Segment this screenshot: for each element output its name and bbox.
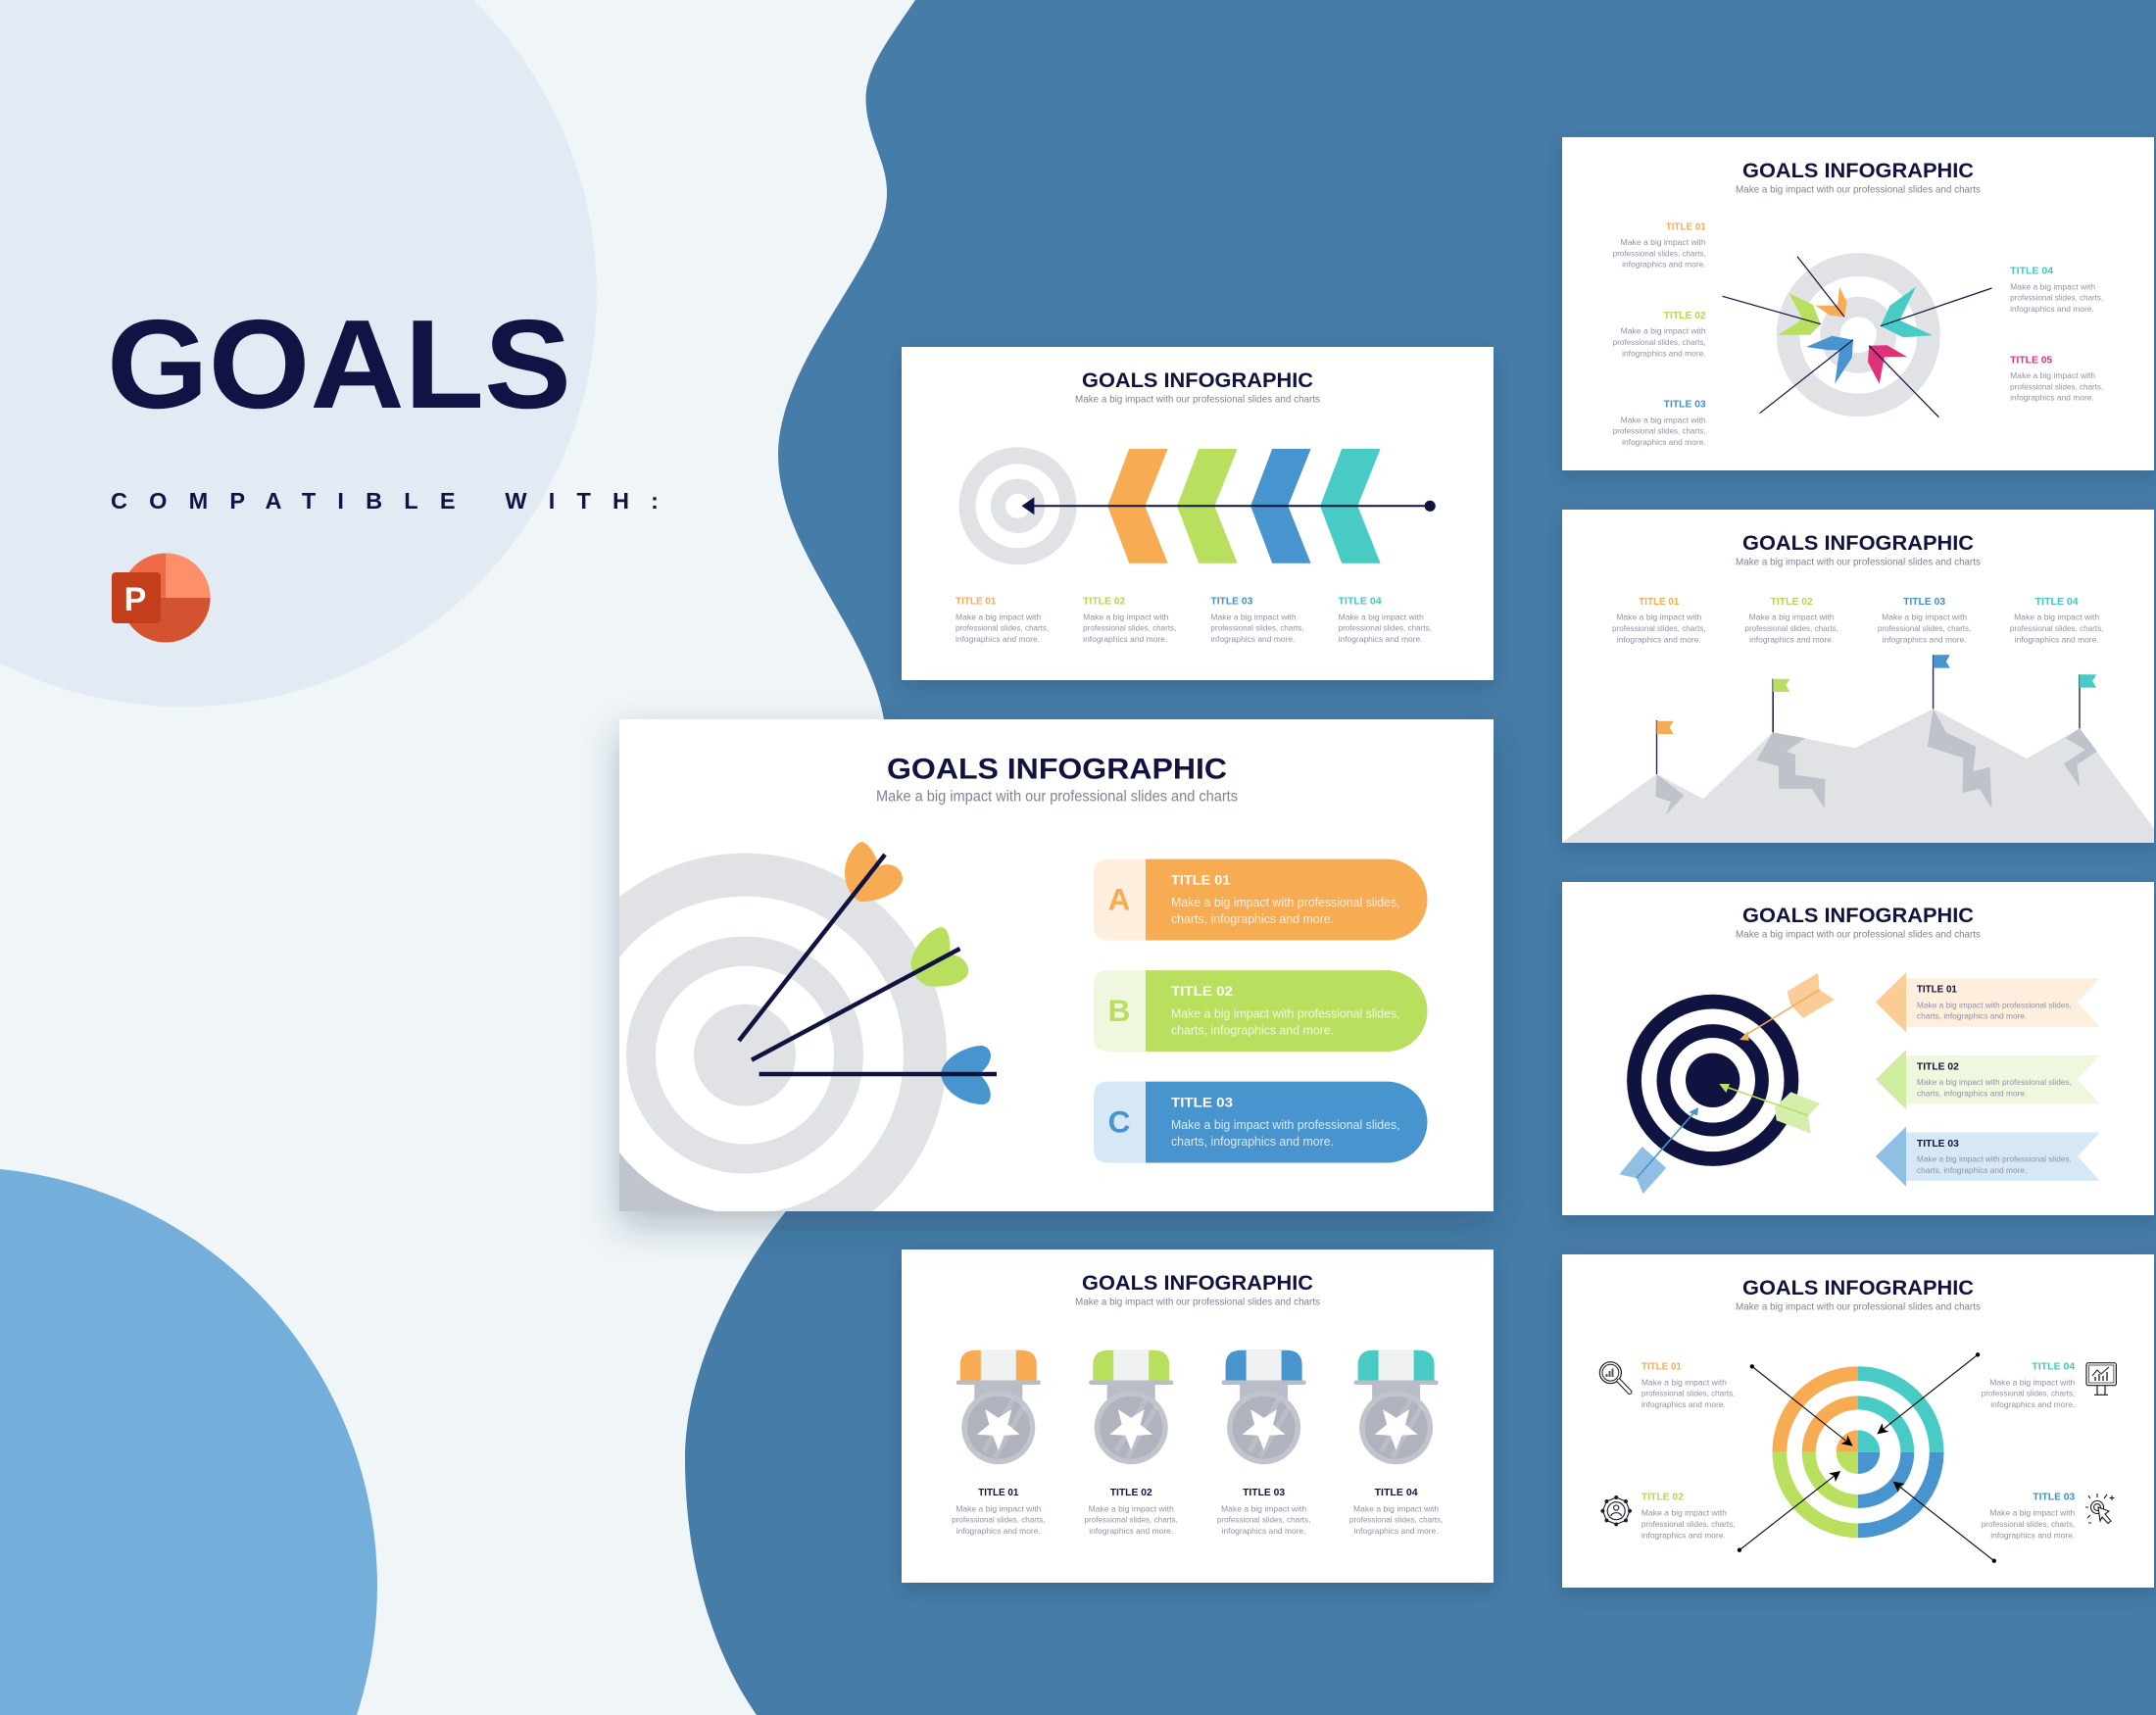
medal 01 with text: TITLE 01 (978, 1488, 1019, 1498)
slide subtitle: Make a big impact with our professional slides and charts (1075, 394, 1320, 406)
text block 02: professional slides, charts, (1642, 1520, 1735, 1529)
flag: green (1773, 679, 1789, 732)
pill A (1094, 859, 1427, 941)
medal 04 with text: professional slides, charts, (1349, 1516, 1443, 1525)
text column 01 (1612, 597, 1706, 644)
panel: five arrows target slide (1562, 137, 2154, 470)
pill C (1094, 1082, 1427, 1162)
navy target (1627, 995, 1798, 1166)
medal 02 with text (1084, 1350, 1178, 1536)
text block 01 (1613, 221, 1706, 270)
mountains (1562, 709, 2156, 843)
chevrons (1107, 449, 1381, 564)
ribbon 02: TITLE 02 (1917, 1061, 1959, 1072)
column text 04: professional slides, charts, (1339, 624, 1432, 633)
text column 02: Make a big impact with (1749, 613, 1835, 622)
text block 04: professional slides, charts, (2010, 294, 2103, 303)
column text 02: infographics and more. (1083, 635, 1167, 644)
background blue wave (685, 0, 2156, 1715)
medal 03 with text: TITLE 03 (1243, 1488, 1286, 1498)
pill C: charts, infographics and more. (1171, 1135, 1334, 1149)
ribbon 03 (1876, 1127, 2100, 1187)
panel: medals slide (902, 1250, 1494, 1583)
pill C: TITLE 03 (1171, 1095, 1233, 1110)
pill B: charts, infographics and more. (1171, 1023, 1334, 1037)
hero heading: GOALS INFOGRAPHIC (887, 753, 1227, 786)
text block 02: professional slides, charts, (1613, 338, 1706, 347)
text block 02 (1642, 1493, 1735, 1540)
column text 02: TITLE 02 (1083, 597, 1126, 608)
text column 03 (1878, 597, 1971, 644)
ribbon 03: TITLE 03 (1917, 1139, 1959, 1150)
text column 01: professional slides, charts, (1612, 624, 1706, 633)
slide heading: GOALS INFOGRAPHIC (1742, 1276, 1974, 1299)
slide heading: GOALS INFOGRAPHIC (1742, 904, 1974, 927)
arrow: orange (1797, 257, 1847, 317)
text block 05: infographics and more. (2010, 394, 2094, 403)
pill B: TITLE 02 (1171, 983, 1233, 999)
text column 03: TITLE 03 (1903, 597, 1946, 608)
medal 02 with text: professional slides, charts, (1084, 1516, 1178, 1525)
text block 02: Make a big impact with (1621, 327, 1706, 336)
column text 01: professional slides, charts, (956, 624, 1049, 633)
icon: magnifier (1599, 1362, 1630, 1392)
text block 03: TITLE 03 (2033, 1493, 2076, 1503)
background circle: top left (0, 0, 597, 707)
pill A: Make a big impact with professional slides, (1171, 896, 1400, 909)
arrow: green (752, 927, 968, 1060)
slide subtitle: Make a big impact with our professional slides and charts (1736, 557, 1981, 568)
slide subtitle: Make a big impact with our professional slides and charts (1075, 1297, 1320, 1308)
text block 03: Make a big impact with (1989, 1509, 2075, 1518)
panel: navy target with ribbons slide (1562, 882, 2154, 1215)
text block 04: infographics and more. (2010, 305, 2094, 314)
text block 02: Make a big impact with (1642, 1509, 1727, 1518)
icon: click cursor (2085, 1494, 2115, 1523)
text block 03: infographics and more. (1990, 1531, 2075, 1540)
column text 03: TITLE 03 (1210, 597, 1253, 608)
medal 02 with text: infographics and more. (1089, 1527, 1173, 1536)
text block 03: infographics and more. (1622, 438, 1706, 447)
column text 02: professional slides, charts, (1083, 624, 1176, 633)
medal 04 with text (1349, 1350, 1443, 1536)
flag: blue (1934, 655, 1950, 709)
text column 01: Make a big impact with (1616, 613, 1701, 622)
column text 04: infographics and more. (1339, 635, 1423, 644)
text block 04: Make a big impact with (2010, 282, 2095, 291)
text block 05: TITLE 05 (2010, 355, 2053, 366)
text block 04: TITLE 04 (2010, 267, 2054, 277)
medal 04 with text: infographics and more. (1354, 1527, 1439, 1536)
slide heading: GOALS INFOGRAPHIC (1742, 159, 1974, 182)
arrow: blue (760, 1046, 997, 1104)
slide heading: GOALS INFOGRAPHIC (1082, 368, 1313, 392)
hero subtitle: Make a big impact with our professional slides and charts (876, 788, 1238, 806)
text block 03: professional slides, charts, (1982, 1520, 2075, 1529)
flag: teal (2080, 674, 2096, 728)
text block 01: Make a big impact with (1621, 238, 1706, 247)
arrows to centre (1738, 1353, 1995, 1562)
text block 04: TITLE 04 (2032, 1361, 2076, 1372)
ribbon 02 (1876, 1050, 2100, 1109)
text block 02 (1613, 311, 1706, 358)
arrow: teal (1881, 287, 1991, 337)
text block 04: Make a big impact with (1989, 1378, 2075, 1387)
text block 02: TITLE 02 (1664, 311, 1706, 321)
column text 01: TITLE 01 (956, 597, 997, 608)
text column 01: TITLE 01 (1639, 597, 1680, 608)
arrow: blue (1760, 336, 1853, 414)
medal 02 with text: Make a big impact with (1089, 1504, 1174, 1513)
column text 01 (956, 597, 1049, 644)
text block 03: TITLE 03 (1664, 400, 1706, 411)
medal 01 with text: infographics and more. (956, 1527, 1041, 1536)
icon: presentation monitor (2086, 1363, 2116, 1395)
text column 01: infographics and more. (1617, 635, 1701, 644)
panel: mountains slide (1562, 510, 2156, 843)
text block 04 (2010, 267, 2103, 314)
text column 04: professional slides, charts, (2010, 624, 2103, 633)
arrow line (1021, 497, 1436, 514)
text column 02: TITLE 02 (1771, 597, 1813, 608)
column text 03: professional slides, charts, (1210, 624, 1304, 633)
column text 03 (1210, 597, 1304, 644)
segmented target (1772, 1366, 1944, 1538)
text block 03: Make a big impact with (1621, 416, 1706, 424)
slide subtitle: Make a big impact with our professional slides and charts (1736, 1301, 1981, 1313)
pill B (1094, 970, 1427, 1052)
medal 02 with text: TITLE 02 (1110, 1488, 1152, 1498)
text block 01: Make a big impact with (1642, 1378, 1727, 1387)
text block 01: TITLE 01 (1642, 1361, 1682, 1372)
text block 04: professional slides, charts, (1982, 1390, 2075, 1398)
text column 04 (2010, 597, 2103, 644)
ribbon 01: charts, infographics and more. (1917, 1012, 2027, 1021)
main title: GOALS (107, 294, 571, 435)
text column 03: infographics and more. (1883, 635, 1967, 644)
column text 01: infographics and more. (956, 635, 1040, 644)
medal 03 with text: infographics and more. (1222, 1527, 1306, 1536)
text block 05 (2010, 355, 2103, 403)
text block 01: TITLE 01 (1666, 221, 1706, 232)
target rings (1777, 253, 1940, 416)
arrow: blue (1619, 1107, 1698, 1194)
column text 02: Make a big impact with (1083, 612, 1168, 621)
text block 01: professional slides, charts, (1613, 249, 1706, 258)
slide subtitle: Make a big impact with our professional slides and charts (1736, 929, 1981, 941)
text column 03: Make a big impact with (1882, 613, 1967, 622)
column text 04 (1339, 597, 1432, 644)
text block 03: professional slides, charts, (1613, 427, 1706, 436)
column text 04: TITLE 04 (1339, 597, 1382, 608)
text column 04: Make a big impact with (2014, 613, 2099, 622)
text block 01: infographics and more. (1642, 1400, 1726, 1409)
panel: segmented target slide (1562, 1254, 2154, 1588)
pill C: Make a big impact with professional slides, (1171, 1118, 1400, 1132)
text column 02: professional slides, charts, (1744, 624, 1838, 633)
text column 04: TITLE 04 (2035, 597, 2079, 608)
text column 02 (1744, 597, 1838, 644)
slide subtitle: Make a big impact with our professional slides and charts (1736, 184, 1981, 196)
text block 01: infographics and more. (1622, 261, 1706, 270)
medal 01 with text (952, 1350, 1045, 1536)
text column 04: infographics and more. (2015, 635, 2099, 644)
arrow: orange (739, 842, 903, 1041)
medal 01 with text: professional slides, charts, (952, 1516, 1046, 1525)
flag: orange (1656, 720, 1674, 774)
icon: PowerPoint logo: P (124, 581, 146, 618)
text block 01 (1642, 1361, 1735, 1409)
text block 02: infographics and more. (1622, 349, 1706, 358)
text block 04: infographics and more. (1990, 1400, 2075, 1409)
medal 04 with text: TITLE 04 (1375, 1488, 1418, 1498)
icon: PowerPoint logo (112, 553, 210, 643)
ribbon 01 (1876, 972, 2100, 1032)
slide heading: GOALS INFOGRAPHIC (1742, 531, 1974, 555)
background circle: bottom left (0, 1169, 377, 1715)
ribbon 01: TITLE 01 (1917, 985, 1957, 996)
column text 04: Make a big impact with (1339, 612, 1424, 621)
medal 01 with text: Make a big impact with (956, 1504, 1041, 1513)
pill A: TITLE 01 (1171, 872, 1231, 888)
text block 03 (1982, 1493, 2076, 1540)
compatible with label: COMPATIBLE WITH: (111, 488, 659, 514)
icon: network (1601, 1496, 1631, 1526)
pill C: C (1108, 1104, 1130, 1140)
arrow: green (1719, 1084, 1820, 1134)
column text 03: Make a big impact with (1210, 612, 1297, 621)
ribbon 03: charts, infographics and more. (1917, 1166, 2027, 1175)
text block 04 (1982, 1361, 2076, 1409)
text column 03: professional slides, charts, (1878, 624, 1971, 633)
text block 02: infographics and more. (1642, 1531, 1726, 1540)
column text 01: Make a big impact with (956, 612, 1041, 621)
pill A: A (1108, 882, 1130, 917)
medal 04 with text: Make a big impact with (1353, 1504, 1439, 1513)
text block 02: TITLE 02 (1642, 1493, 1684, 1503)
medal 03 with text (1217, 1350, 1310, 1536)
panel: fletched arrows chevron slide (902, 347, 1494, 680)
panel: hero slide with target and pills (543, 719, 1494, 1257)
pill B: B (1108, 993, 1130, 1028)
ribbon 01: Make a big impact with professional slides, (1917, 1001, 2072, 1009)
ribbon 02: charts, infographics and more. (1917, 1089, 2027, 1098)
medal 03 with text: professional slides, charts, (1217, 1516, 1310, 1525)
text block 05: Make a big impact with (2010, 371, 2095, 380)
target icon (958, 447, 1076, 564)
pill A: charts, infographics and more. (1171, 912, 1334, 926)
text column 02: infographics and more. (1749, 635, 1834, 644)
column text 03: infographics and more. (1210, 635, 1295, 644)
text block 01: professional slides, charts, (1642, 1390, 1735, 1398)
column text 02 (1083, 597, 1176, 644)
arrow: orange (1740, 973, 1835, 1041)
arrow: pink (1868, 345, 1938, 417)
ribbon 03: Make a big impact with professional slides, (1917, 1155, 2072, 1164)
text block 03 (1613, 400, 1706, 447)
pill B: Make a big impact with professional slides, (1171, 1007, 1400, 1021)
text block 05: professional slides, charts, (2010, 382, 2103, 391)
large target (619, 853, 947, 1211)
arrow: green (1723, 293, 1821, 335)
slide heading: GOALS INFOGRAPHIC (1082, 1271, 1313, 1295)
medal 03 with text: Make a big impact with (1221, 1504, 1306, 1513)
ribbon 02: Make a big impact with professional slides, (1917, 1078, 2072, 1087)
